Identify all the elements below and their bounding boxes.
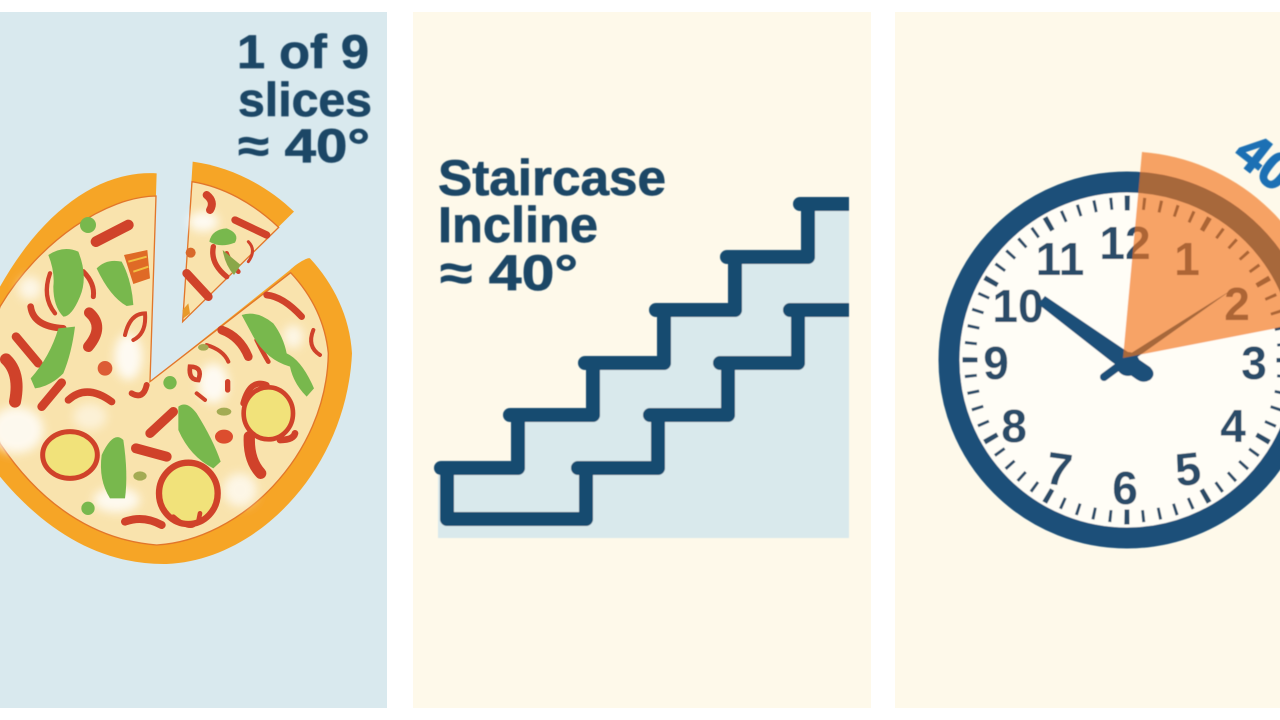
- panel: clock: [895, 12, 1280, 708]
- clock numerals: 2: [1224, 278, 1250, 330]
- illustration: clock face: [949, 152, 1280, 538]
- clock numerals: 8: [1001, 400, 1027, 452]
- stair lines: [441, 204, 860, 519]
- clock numerals: 12: [1099, 217, 1151, 269]
- staircase fill: [438, 204, 849, 538]
- illustration: pizza with one slice pulled out: [0, 162, 352, 564]
- clock numerals: 3: [1241, 337, 1267, 389]
- heading: 1 of 9 slices about 40 degrees: slices: [238, 73, 372, 126]
- clock numerals: 11: [1036, 233, 1084, 285]
- panel: staircase: [413, 12, 871, 708]
- illustration: staircase outline: [438, 204, 860, 538]
- clock numerals: 6: [1112, 462, 1138, 514]
- clock hands: [1038, 289, 1233, 382]
- highlighted 40 degree wedge: [1123, 152, 1280, 358]
- panel: pizza: [0, 12, 387, 708]
- minute ticks: [970, 203, 1280, 517]
- pizza body: [0, 173, 352, 564]
- toppings: pepperoni rings: [43, 387, 293, 524]
- clock dial and ring: [949, 182, 1280, 538]
- heading: staircase incline about 40 degrees: [438, 150, 666, 301]
- heading: staircase incline about 40 degrees: ≈ 40°: [440, 245, 578, 301]
- heading: 1 of 9 slices about 40 degrees: [237, 25, 372, 172]
- heading: staircase incline about 40 degrees: Incline: [438, 197, 598, 253]
- heading: 1 of 9 slices about 40 degrees: 1 of 9: [237, 25, 369, 78]
- pizza slice: [183, 162, 294, 322]
- toppings: green leaves: [31, 217, 314, 515]
- clock numerals: 7: [1043, 441, 1075, 497]
- clock numerals: 9: [983, 337, 1009, 389]
- clock numerals: [983, 217, 1267, 514]
- toppings: red pepper strips: [6, 225, 320, 525]
- clock numerals: 1: [1174, 233, 1200, 285]
- toppings: pepperoni dots and chips: [98, 250, 233, 526]
- clock numerals: 10: [992, 280, 1044, 332]
- upper stair line: [441, 204, 860, 468]
- lower stair line: [447, 310, 860, 519]
- clock numerals: 4: [1220, 400, 1246, 452]
- heading: 1 of 9 slices about 40 degrees: ≈ 40°: [238, 119, 370, 172]
- clock numerals: 5: [1172, 442, 1203, 496]
- heading: staircase incline about 40 degrees: Staircase: [438, 150, 666, 206]
